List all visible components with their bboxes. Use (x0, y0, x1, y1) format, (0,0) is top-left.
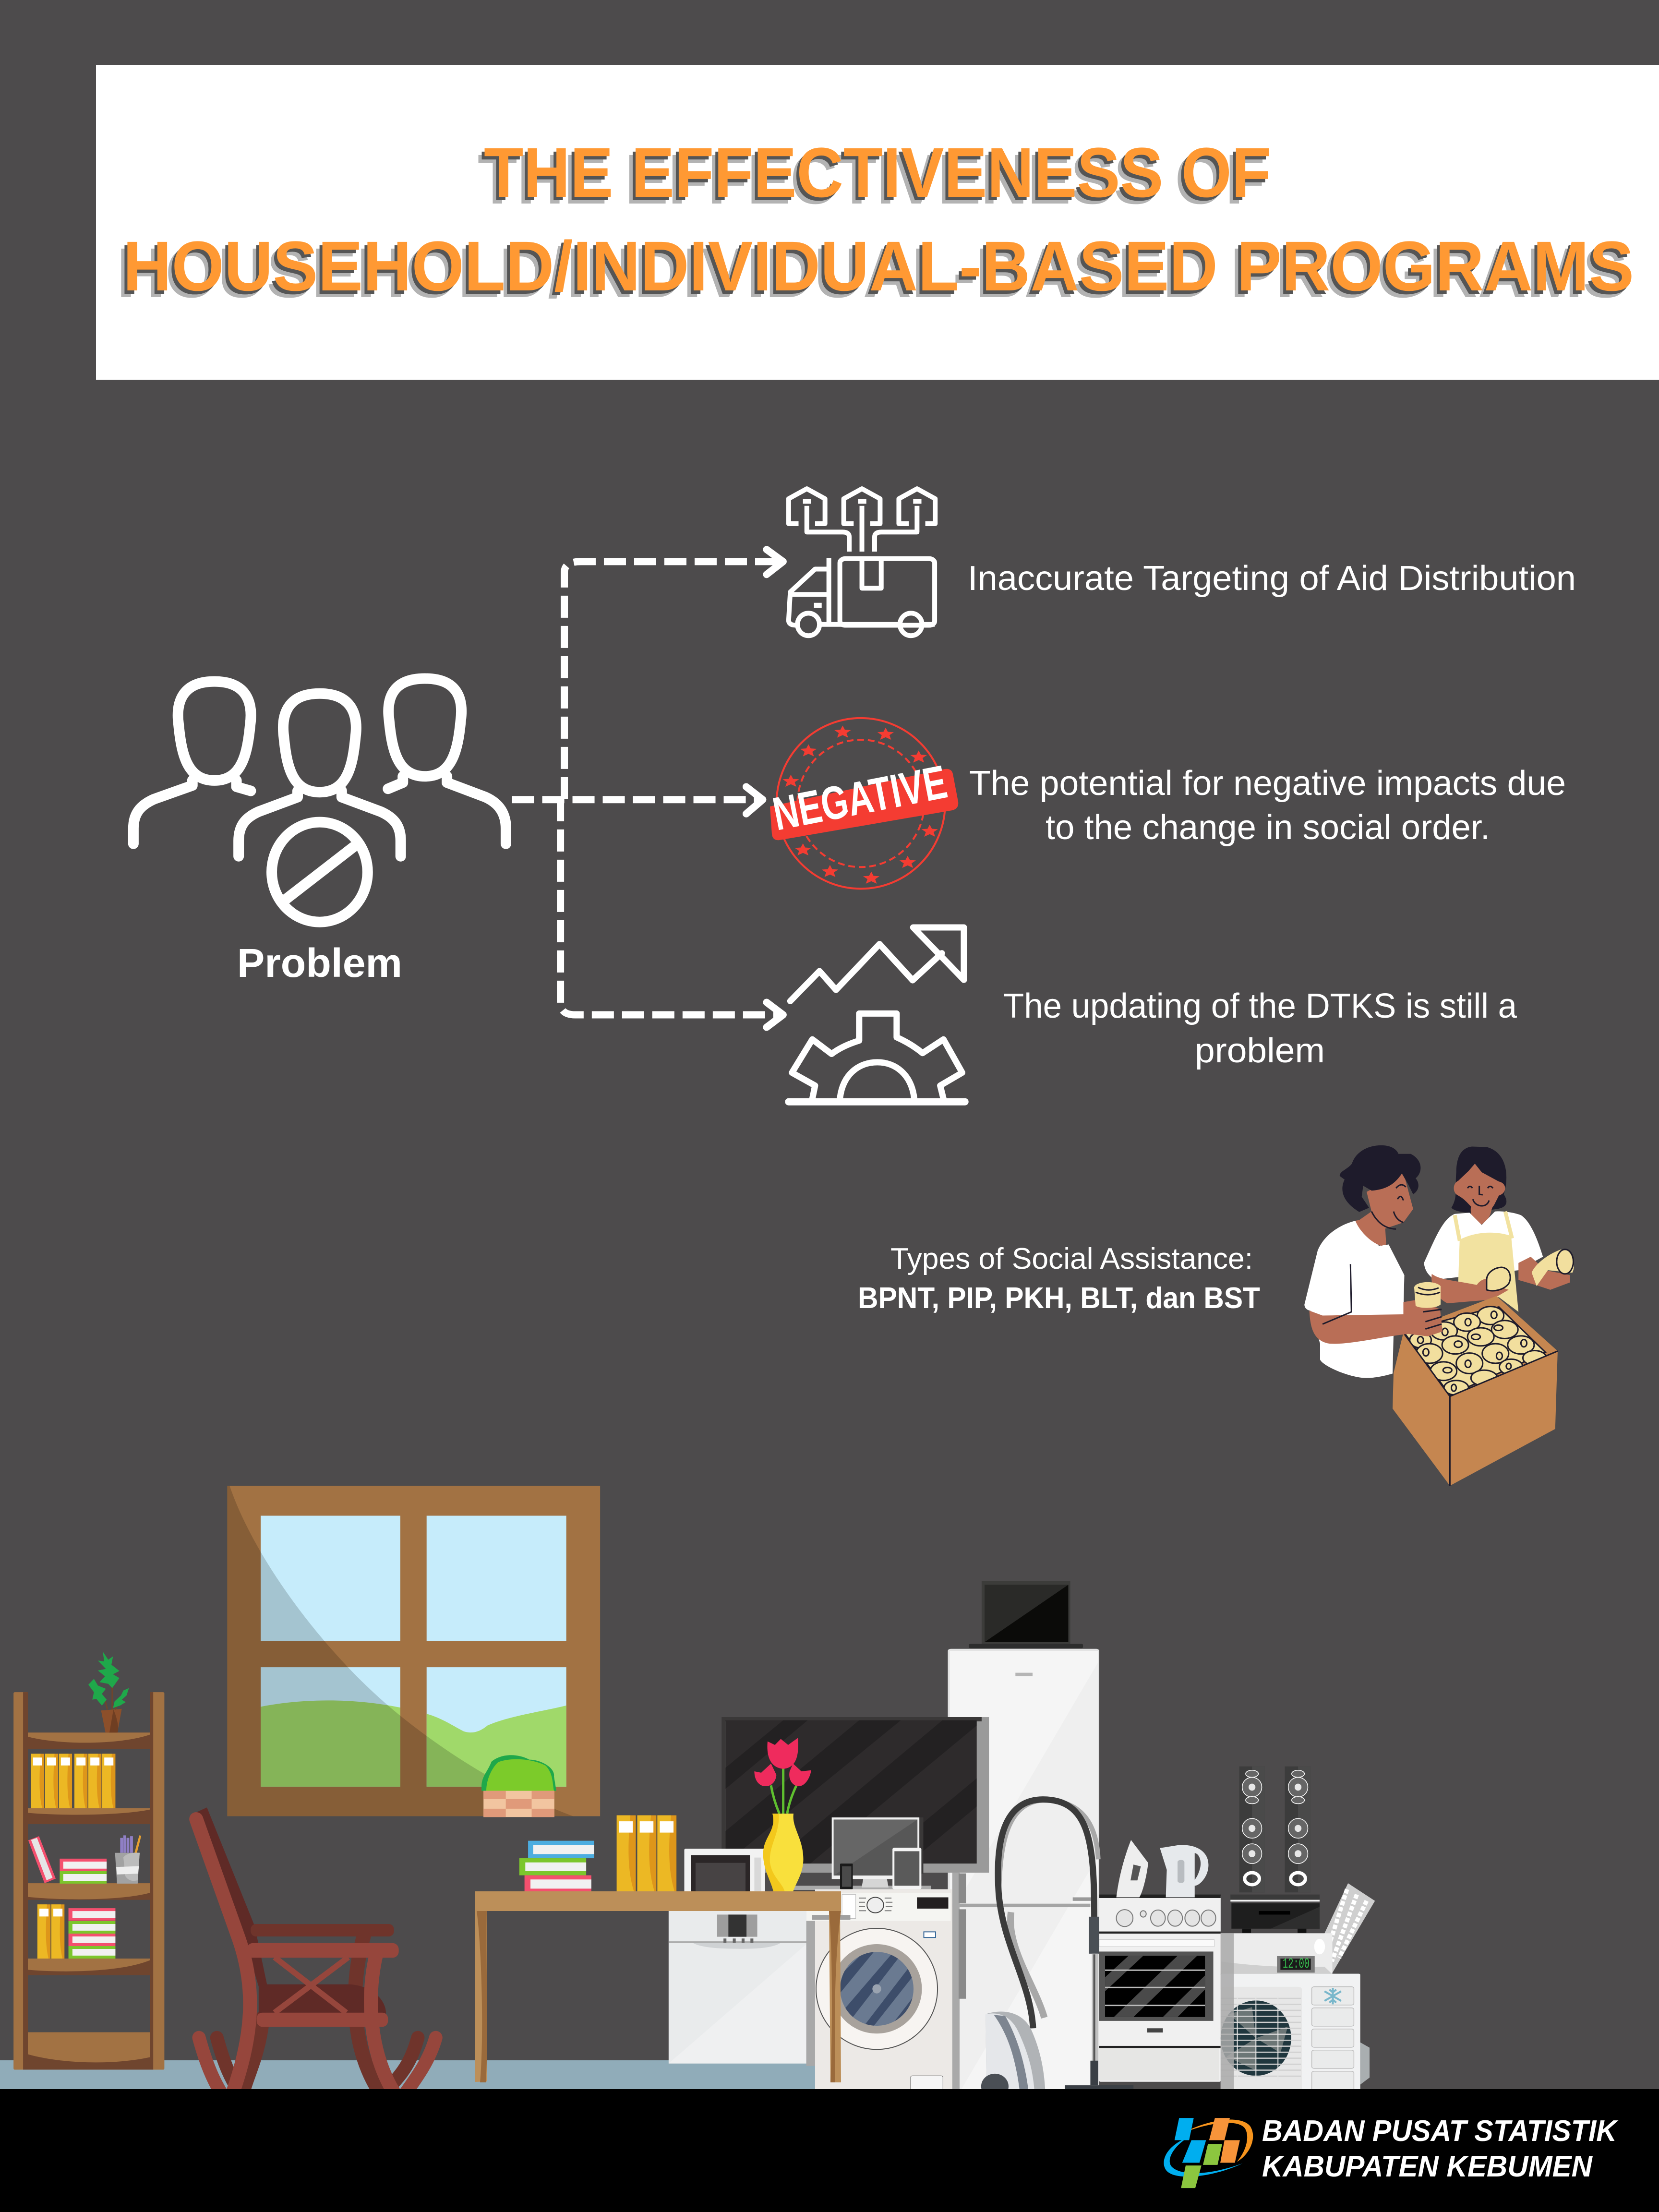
dishwasher (669, 1909, 816, 2066)
window with hills (227, 1486, 600, 1817)
shelf books (28, 1836, 115, 1959)
potted plant (88, 1651, 129, 1732)
footer text: BADAN PUSAT STATISTIK (1262, 2115, 1619, 2148)
cans (1410, 1307, 1546, 1395)
clock display: 12:00 (1283, 1956, 1310, 1972)
dashed arrows (512, 550, 783, 1027)
text: negative impacts (969, 764, 1566, 847)
text: negative impacts: The potential for negative impacts due (969, 764, 1566, 803)
rocking chair (195, 1807, 436, 2092)
appliances (669, 1581, 1375, 2099)
stove (1099, 1895, 1221, 2082)
logo: BPS (1164, 2118, 1253, 2188)
text: types of social assistance: Types of Social Assistance: (890, 1242, 1253, 1275)
icon: delivery truck with houses (789, 489, 935, 636)
laptop (969, 1581, 1083, 1648)
desk top and legs (475, 1891, 841, 2082)
vase with tulips (754, 1738, 811, 1892)
label: Problem: Problem (237, 940, 402, 986)
vacuum cleaner (981, 1800, 1133, 2099)
icon: snowflake (1324, 1988, 1341, 2004)
phone and tablet (840, 1848, 921, 1889)
kettle (1160, 1845, 1208, 1898)
text: negative impacts: to the change in social order. (1046, 808, 1490, 847)
floor (0, 2060, 866, 2089)
title: THE EFFECTIVENESS OF (484, 133, 1271, 212)
man (1304, 1145, 1443, 1378)
television (721, 1717, 989, 1873)
text: DTKS update: problem (1195, 1032, 1325, 1070)
stamp band (770, 769, 958, 840)
woman (1424, 1146, 1574, 1312)
monitor (793, 1817, 931, 1890)
title banner (96, 65, 1659, 380)
microwave (685, 1849, 765, 1893)
keyboard (1314, 1883, 1375, 1974)
window plant (481, 1755, 556, 1817)
title (123, 133, 1634, 306)
title: HOUSEHOLD/INDIVIDUAL-BASED PROGRAMS (123, 227, 1634, 306)
text: DTKS update: The updating of the DTKS is still a (1003, 987, 1517, 1025)
speakers (1239, 1767, 1311, 1892)
footer text (1262, 2115, 1619, 2183)
footer text: KABUPATEN KEBUMEN (1262, 2150, 1593, 2183)
desk binders (617, 1815, 676, 1893)
desk books (519, 1841, 594, 1893)
text: inaccurate targeting: Inaccurate Targeting of Aid Distribution (968, 559, 1576, 598)
stamp word: NEGATIVE (769, 755, 951, 841)
pencil cup (115, 1835, 141, 1884)
stereo receiver (1230, 1895, 1320, 1933)
text: types of social assistance (858, 1242, 1260, 1315)
box (1393, 1296, 1558, 1486)
icon: three people with ban symbol (133, 679, 506, 922)
icon: negative stamp (769, 718, 958, 889)
illustration: two people packing cans in a box (1304, 1145, 1574, 1486)
footer bar (0, 2089, 1659, 2212)
text: types of social assistance: BPNT, PIP, PKH, BLT, dan BST (858, 1282, 1260, 1315)
fridge (948, 1649, 1099, 2092)
washing machine (806, 1889, 952, 2093)
bookshelf (13, 1651, 164, 2069)
binders (31, 1754, 115, 1959)
iron (1117, 1840, 1148, 1898)
air conditioner (1221, 1933, 1370, 2092)
icon: rising chart and gear (789, 927, 965, 1102)
text: DTKS update (1003, 987, 1517, 1070)
desk with books, binders and vase (475, 1738, 841, 2082)
printer (1221, 1933, 1332, 1974)
